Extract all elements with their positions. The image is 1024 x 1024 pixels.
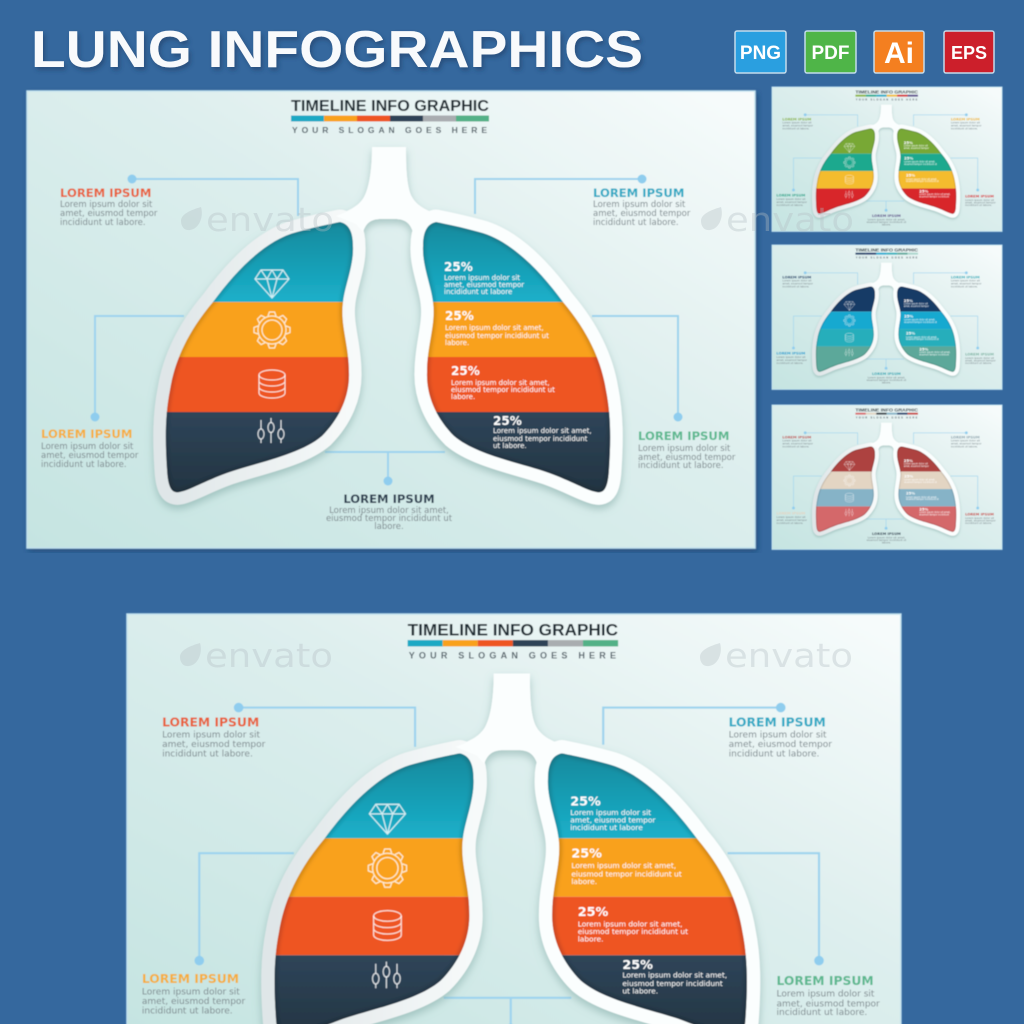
variant background bbox=[772, 245, 1002, 389]
band text: navy bbox=[493, 414, 592, 450]
band text: teal: 25% bbox=[570, 794, 601, 809]
variant band text: Lorem ipsum dolor sit amet, bbox=[904, 319, 935, 322]
format badges bbox=[735, 31, 994, 73]
label: bottom left: LOREM IPSUM bbox=[142, 972, 239, 986]
variant band text: Lorem ipsum dolor sit bbox=[904, 303, 928, 306]
label: top left: Lorem ipsum dolor sit bbox=[162, 730, 260, 740]
variant heading bbox=[855, 89, 918, 101]
variant band text: amet, eiusmod tempor bbox=[904, 305, 929, 308]
band text: orange: 25% bbox=[445, 309, 474, 323]
variant connectors bbox=[792, 271, 979, 370]
variant heading: YOUR SLOGAN GOES HERE bbox=[856, 97, 918, 101]
panel background bbox=[127, 614, 901, 1024]
variant band text: Lorem ipsum dolor sit amet, bbox=[904, 161, 935, 164]
variant labels: eiusmod tempor incididunt ut bbox=[867, 538, 906, 542]
label: top left: amet, eiusmod tempor bbox=[162, 740, 266, 750]
band text: teal: 25% bbox=[444, 260, 473, 274]
label: bottom left: Lorem ipsum dolor sit bbox=[142, 988, 240, 998]
variant band text: 25% bbox=[919, 507, 929, 512]
panel: main lung infographic bbox=[27, 91, 755, 548]
label: bottom right: Lorem ipsum dolor sit bbox=[638, 444, 731, 454]
variant labels: LOREM IPSUM bbox=[782, 275, 812, 279]
lung outline and trachea bbox=[166, 147, 610, 492]
variant band text: 25% bbox=[904, 298, 913, 303]
band text: navy: eiusmod tempor incididunt bbox=[622, 979, 723, 988]
variant labels: LOREM IPSUM bbox=[782, 117, 812, 121]
variant band text bbox=[904, 298, 951, 357]
variant labels: Lorem ipsum dolor sit bbox=[776, 355, 805, 359]
band text: teal: incididunt ut labore bbox=[444, 288, 512, 296]
band text: red: labore. bbox=[451, 393, 475, 401]
badge: PNG bbox=[735, 31, 786, 73]
variant band text: Lorem ipsum dolor sit bbox=[904, 145, 928, 148]
variant labels: incididunt ut labore. bbox=[965, 361, 992, 365]
variant band text: Lorem ipsum dolor sit amet, bbox=[906, 178, 937, 181]
badge: Ai: Ai bbox=[884, 37, 914, 70]
band text: navy: 25% bbox=[493, 414, 522, 428]
lung outline and trachea bbox=[274, 674, 747, 1024]
band icons bbox=[368, 804, 407, 988]
band text: orange bbox=[445, 309, 549, 347]
variant background bbox=[772, 405, 1002, 549]
badge: PDF bbox=[805, 31, 856, 73]
variant labels: amet, eiusmod tempor bbox=[776, 518, 808, 522]
variant labels: LOREM IPSUM bbox=[965, 194, 994, 198]
variant labels: Lorem ipsum dolor sit bbox=[951, 279, 980, 283]
panel: green and red variant bbox=[772, 87, 1002, 231]
variant right bands bbox=[896, 446, 957, 532]
variant labels: LOREM IPSUM bbox=[965, 352, 994, 356]
label: top left: incididunt ut labore. bbox=[162, 749, 253, 759]
variant labels: LOREM IPSUM bbox=[965, 512, 994, 516]
variant heading: TIMELINE INFO GRAPHIC bbox=[855, 247, 918, 253]
variant labels: Lorem ipsum dolor sit amet, bbox=[868, 535, 905, 539]
variant labels: eiusmod tempor incididunt ut bbox=[867, 220, 906, 224]
label: top left: LOREM IPSUM bbox=[60, 186, 151, 200]
panel heading: YOUR SLOGAN GOES HERE bbox=[409, 651, 616, 661]
band text: red: labore. bbox=[578, 934, 603, 943]
variant heading: TIMELINE INFO GRAPHIC bbox=[855, 89, 918, 95]
variant band text bbox=[904, 140, 951, 199]
label: bottom right: incididunt ut labore. bbox=[776, 1008, 867, 1018]
variant band text: Lorem ipsum dolor sit amet, bbox=[906, 336, 937, 339]
variant labels: LOREM IPSUM bbox=[872, 372, 901, 376]
band text: navy: 25% bbox=[622, 958, 653, 973]
band text: red: Lorem ipsum dolor sit amet, bbox=[578, 920, 683, 929]
variant band text: Lorem ipsum dolor sit amet, bbox=[919, 351, 951, 354]
band text: teal bbox=[570, 794, 656, 832]
variant labels: LOREM IPSUM bbox=[776, 512, 806, 516]
band text: navy bbox=[622, 958, 727, 996]
band text: red: Lorem ipsum dolor sit amet, bbox=[451, 379, 550, 387]
variant background bbox=[772, 87, 1002, 231]
variant labels: amet, eiusmod tempor bbox=[776, 200, 808, 204]
label: bottom left: amet, eiusmod tempor bbox=[142, 997, 245, 1007]
variant labels: amet, eiusmod tempor bbox=[965, 519, 997, 523]
label: bottom left: incididunt ut labore. bbox=[41, 460, 127, 470]
variant labels: LOREM IPSUM bbox=[951, 117, 980, 121]
variant labels: amet, eiusmod tempor bbox=[951, 441, 982, 445]
variant labels: labore. bbox=[882, 222, 891, 226]
variant band text: Lorem ipsum dolor sit amet, bbox=[919, 511, 951, 514]
band text: navy: Lorem ipsum dolor sit amet, bbox=[493, 427, 592, 435]
variant heading bbox=[855, 247, 918, 259]
variant band text: 25% bbox=[906, 491, 915, 496]
label: bottom right: incididunt ut labore. bbox=[638, 461, 724, 471]
variant labels: incididunt ut labore. bbox=[776, 361, 803, 365]
variant labels: Lorem ipsum dolor sit bbox=[776, 515, 805, 519]
label: top right bbox=[729, 716, 832, 759]
variant band text: eiusmod tempor incididunt ut bbox=[904, 321, 937, 324]
label: top right: Lorem ipsum dolor sit bbox=[729, 730, 827, 740]
label: top right: incididunt ut labore. bbox=[729, 749, 819, 759]
variant band text: 25% bbox=[906, 331, 915, 336]
variant labels: amet, eiusmod tempor bbox=[951, 281, 982, 285]
variant labels: Lorem ipsum dolor sit bbox=[776, 197, 805, 201]
band text: teal: Lorem ipsum dolor sit bbox=[444, 274, 520, 282]
label: bottom right bbox=[638, 429, 736, 471]
variant labels: amet, eiusmod tempor bbox=[965, 359, 997, 363]
variant inner shadow bbox=[816, 446, 956, 532]
variant band text: 25% bbox=[904, 313, 913, 318]
variant connectors bbox=[792, 431, 979, 530]
connector lines bbox=[90, 174, 682, 486]
badge: EPS bbox=[944, 31, 994, 73]
variant band text: eiusmod tempor incididunt ut bbox=[906, 498, 939, 501]
variant icons bbox=[844, 144, 855, 198]
variant icons bbox=[844, 462, 855, 516]
label: bottom right: amet, eiusmod tempor bbox=[638, 453, 736, 463]
label: bottom right: LOREM IPSUM bbox=[638, 429, 729, 443]
band text: navy: eiusmod tempor incididunt bbox=[493, 435, 588, 443]
label: bottom left: Lorem ipsum dolor sit bbox=[41, 442, 134, 452]
band icons bbox=[254, 270, 290, 443]
label: top right: amet, eiusmod tempor bbox=[729, 740, 832, 750]
label: bottom centre: labore. bbox=[374, 522, 404, 532]
variant labels: incididunt ut labore. bbox=[951, 126, 978, 130]
panel background bbox=[27, 91, 755, 548]
label: bottom left bbox=[142, 972, 245, 1017]
variant band text: Lorem ipsum dolor sit amet, bbox=[904, 479, 935, 482]
connector lines bbox=[195, 703, 824, 1024]
band text: orange: Lorem ipsum dolor sit amet, bbox=[445, 324, 544, 332]
band text: navy: Lorem ipsum dolor sit amet, bbox=[622, 971, 727, 980]
label: top left bbox=[60, 186, 158, 228]
label: top right: amet, eiusmod tempor bbox=[593, 209, 691, 219]
band text: navy: ut labore. bbox=[622, 987, 658, 996]
variant lung outline bbox=[816, 423, 956, 532]
lung inner shadow bbox=[274, 753, 747, 1024]
variant labels: amet, eiusmod tempor bbox=[782, 123, 814, 127]
variant labels: LOREM IPSUM bbox=[872, 532, 901, 536]
variant labels: Lorem ipsum dolor sit bbox=[782, 121, 811, 125]
variant labels: LOREM IPSUM bbox=[776, 352, 806, 356]
variant band text: 25% bbox=[919, 347, 929, 352]
band text: teal: incididunt ut labore bbox=[570, 823, 643, 832]
variant band text: eiusmod tempor incididunt ut bbox=[906, 338, 939, 341]
badge: EPS: EPS bbox=[951, 43, 987, 63]
label: top right: incididunt ut labore. bbox=[593, 218, 679, 228]
badge: PNG: PNG bbox=[740, 43, 781, 64]
lung inner shadow bbox=[166, 222, 610, 492]
band text: teal: Lorem ipsum dolor sit bbox=[570, 808, 651, 817]
watermark: envato upper right: envato bbox=[726, 200, 854, 239]
variant labels: Lorem ipsum dolor sit bbox=[782, 439, 811, 443]
variant labels bbox=[776, 275, 997, 384]
left lung bands bbox=[165, 222, 354, 493]
variant heading: YOUR SLOGAN GOES HERE bbox=[856, 415, 918, 419]
variant band text bbox=[904, 458, 951, 517]
variant labels: labore. bbox=[882, 380, 891, 384]
bottom panel content bbox=[127, 614, 901, 1024]
watermark: envato lower left: envato bbox=[205, 636, 333, 675]
variant labels: incididunt ut labore. bbox=[965, 521, 992, 525]
variant right bands bbox=[896, 286, 957, 372]
variant band text: 25% bbox=[904, 140, 913, 145]
variant labels: amet, eiusmod tempor bbox=[951, 123, 982, 127]
variant band text: 25% bbox=[906, 173, 915, 178]
label: top left: amet, eiusmod tempor bbox=[60, 209, 158, 219]
variant lung outline bbox=[816, 105, 956, 214]
title: LUNG INFOGRAPHICS bbox=[31, 21, 643, 79]
variant band text: eiusmod tempor incididunt ut bbox=[906, 180, 939, 183]
variant icons bbox=[844, 302, 855, 356]
right lung bands bbox=[547, 752, 748, 1024]
band text: red bbox=[451, 364, 555, 401]
label: top left bbox=[162, 716, 266, 759]
band text: orange: Lorem ipsum dolor sit amet, bbox=[571, 861, 676, 870]
variant band text: 25% bbox=[904, 458, 913, 463]
watermark: envato upper left: envato bbox=[206, 200, 334, 239]
variant labels: eiusmod tempor incididunt ut bbox=[867, 378, 906, 382]
band text: red bbox=[578, 905, 688, 943]
variant band text: amet, eiusmod tempor bbox=[904, 465, 929, 468]
variant labels: Lorem ipsum dolor sit amet, bbox=[868, 375, 905, 379]
variant heading bbox=[855, 407, 918, 419]
variant labels: LOREM IPSUM bbox=[776, 194, 806, 198]
variant labels: incididunt ut labore. bbox=[782, 444, 809, 448]
band text: red: 25% bbox=[578, 905, 608, 920]
label: top left: Lorem ipsum dolor sit bbox=[60, 200, 153, 210]
band text: orange: labore. bbox=[571, 877, 597, 886]
badge: PDF: PDF bbox=[812, 43, 850, 64]
label: bottom centre: LOREM IPSUM bbox=[343, 492, 435, 506]
band text: orange bbox=[571, 846, 682, 886]
variant labels: amet, eiusmod tempor bbox=[782, 281, 814, 285]
variant labels: Lorem ipsum dolor sit bbox=[965, 516, 994, 520]
variant labels: incididunt ut labore. bbox=[776, 203, 803, 207]
variant band text: Lorem ipsum dolor sit bbox=[904, 463, 928, 466]
band text: teal bbox=[444, 260, 524, 296]
band text: teal: amet, eiusmod tempor bbox=[444, 281, 524, 289]
band text: red: eiusmod tempor incididunt ut bbox=[578, 927, 688, 936]
variant band text: 25% bbox=[904, 155, 913, 160]
variant labels: incididunt ut labore. bbox=[782, 284, 809, 288]
variant left bands bbox=[815, 128, 876, 214]
variant band text: eiusmod tempor incididunt ut bbox=[904, 481, 937, 484]
variant labels: amet, eiusmod tempor bbox=[776, 358, 808, 362]
variant labels: incididunt ut labore. bbox=[951, 444, 978, 448]
variant inner shadow bbox=[816, 128, 956, 214]
variant band text: Lorem ipsum dolor sit amet, bbox=[919, 193, 951, 196]
variant labels: LOREM IPSUM bbox=[951, 435, 980, 439]
variant labels: amet, eiusmod tempor bbox=[965, 201, 997, 205]
variant band text: eiusmod tempor incididunt bbox=[919, 514, 949, 517]
variant labels: Lorem ipsum dolor sit bbox=[965, 356, 994, 360]
variant left bands bbox=[815, 446, 876, 532]
variant band text: 25% bbox=[919, 189, 929, 194]
variant band text: 25% bbox=[904, 473, 913, 478]
label: bottom left: incididunt ut labore. bbox=[142, 1007, 233, 1017]
variant labels: amet, eiusmod tempor bbox=[782, 441, 814, 445]
variant labels: incididunt ut labore. bbox=[965, 203, 992, 207]
panel: blue variant bbox=[772, 245, 1002, 389]
variant lung outline bbox=[816, 263, 956, 372]
variant labels: incididunt ut labore. bbox=[782, 126, 809, 130]
band text: navy: ut labore. bbox=[493, 442, 527, 450]
variant labels: labore. bbox=[882, 540, 891, 544]
band text: orange: eiusmod tempor incididunt ut bbox=[571, 870, 682, 879]
band text: orange: labore. bbox=[445, 339, 469, 347]
label: top right: LOREM IPSUM bbox=[593, 186, 684, 200]
panel heading: TIMELINE INFO GRAPHIC bbox=[291, 98, 489, 115]
right lung bands bbox=[422, 222, 611, 493]
variant heading: TIMELINE INFO GRAPHIC bbox=[855, 407, 918, 413]
variant right bands bbox=[896, 128, 957, 214]
band text: orange: 25% bbox=[571, 846, 602, 861]
label: bottom centre: Lorem ipsum dolor sit amet, bbox=[329, 506, 449, 516]
label: bottom right: LOREM IPSUM bbox=[776, 974, 874, 988]
label: top left: LOREM IPSUM bbox=[162, 716, 259, 730]
panel heading: TIMELINE INFO GRAPHIC bbox=[408, 621, 618, 639]
variant labels: Lorem ipsum dolor sit bbox=[951, 121, 980, 125]
panel heading bbox=[291, 98, 489, 135]
label: top right: Lorem ipsum dolor sit bbox=[593, 200, 686, 210]
variant left bands bbox=[815, 286, 876, 372]
label: top right: LOREM IPSUM bbox=[729, 716, 826, 730]
label: bottom right bbox=[776, 974, 880, 1018]
variant labels: incididunt ut labore. bbox=[776, 521, 803, 525]
variant labels: Lorem ipsum dolor sit bbox=[965, 198, 994, 202]
badge: Ai bbox=[874, 31, 924, 73]
variant labels: incididunt ut labore. bbox=[951, 284, 978, 288]
panel: large bottom lung infographic bbox=[127, 614, 901, 1024]
watermark: envato lower right: envato bbox=[725, 636, 853, 675]
variant band text: amet, eiusmod tempor bbox=[904, 147, 929, 150]
variant band text: eiusmod tempor incididunt bbox=[919, 354, 949, 357]
label: top left: incididunt ut labore. bbox=[60, 218, 146, 228]
variant labels: Lorem ipsum dolor sit bbox=[782, 279, 811, 283]
label: bottom right: Lorem ipsum dolor sit bbox=[776, 990, 875, 1000]
panel heading: YOUR SLOGAN GOES HERE bbox=[292, 125, 487, 135]
band text: orange: eiusmod tempor incididunt ut bbox=[445, 332, 549, 340]
variant band text: eiusmod tempor incididunt ut bbox=[904, 163, 937, 166]
label: bottom left: amet, eiusmod tempor bbox=[41, 451, 139, 461]
variant band text: Lorem ipsum dolor sit amet, bbox=[906, 496, 937, 499]
variant labels: LOREM IPSUM bbox=[782, 435, 812, 439]
panel: muted red variant bbox=[772, 405, 1002, 549]
panel heading bbox=[408, 621, 618, 661]
variant labels: Lorem ipsum dolor sit bbox=[951, 439, 980, 443]
variant labels: LOREM IPSUM bbox=[872, 214, 901, 218]
label: top right bbox=[593, 186, 691, 228]
variant labels: LOREM IPSUM bbox=[951, 275, 980, 279]
label: bottom centre bbox=[326, 492, 453, 532]
label: bottom left: LOREM IPSUM bbox=[41, 427, 132, 441]
label: bottom centre: eiusmod tempor incididunt ut bbox=[326, 514, 453, 524]
variant connectors bbox=[792, 113, 979, 212]
band text: teal: amet, eiusmod tempor bbox=[570, 815, 656, 824]
variant labels bbox=[776, 435, 997, 544]
variant heading: YOUR SLOGAN GOES HERE bbox=[856, 255, 918, 259]
label: bottom right: amet, eiusmod tempor bbox=[776, 999, 880, 1009]
variant band text: eiusmod tempor incididunt bbox=[919, 196, 949, 199]
label: bottom left bbox=[41, 427, 139, 470]
band text: red: 25% bbox=[451, 364, 480, 378]
left lung bands bbox=[274, 752, 474, 1024]
variant inner shadow bbox=[816, 286, 956, 372]
band text: red: eiusmod tempor incididunt ut bbox=[451, 386, 555, 394]
variant labels bbox=[776, 117, 997, 226]
variant labels: Lorem ipsum dolor sit amet, bbox=[868, 217, 905, 221]
